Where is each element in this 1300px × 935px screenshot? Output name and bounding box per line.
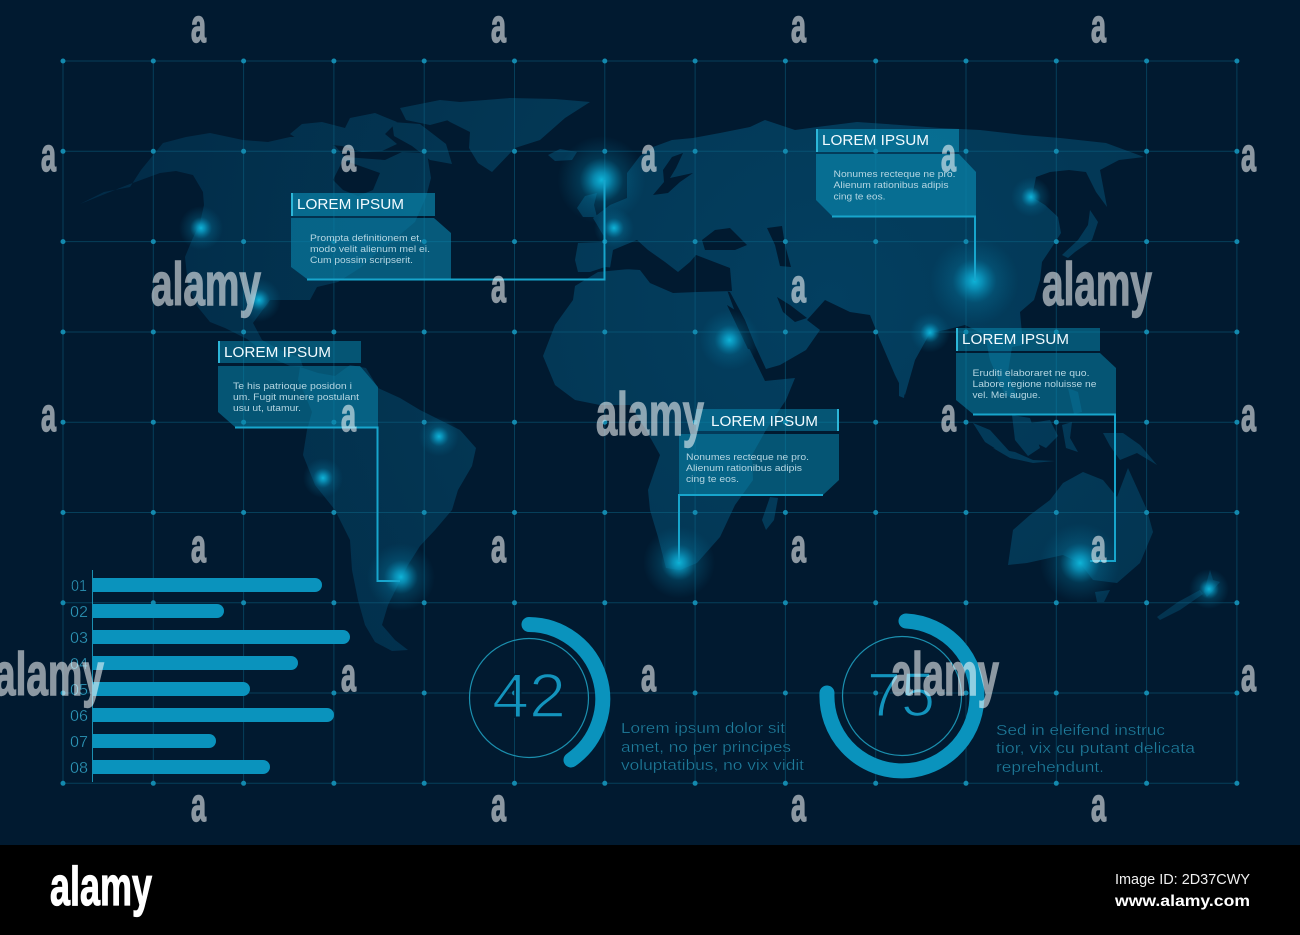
stock watermark overlay: a — [491, 259, 506, 312]
gauge text: 75: Sed in eleifend instruc — [996, 723, 1165, 739]
footer bar: www.alamy.com — [1114, 893, 1250, 910]
stock watermark overlay: a — [791, 0, 806, 52]
bar chart: 04 — [70, 656, 88, 673]
stock watermark overlay: a — [941, 388, 956, 441]
gauge text: 42: amet, no per principes — [621, 740, 791, 756]
bar chart: 01 — [71, 578, 87, 595]
panel: north america callout: modo velit alienum mel ei. — [310, 244, 430, 255]
stock watermark overlay: a — [191, 519, 206, 572]
panel: africa callout — [679, 409, 839, 562]
stock watermark overlay: a — [791, 519, 806, 572]
panel: south america callout: LOREM IPSUM — [224, 344, 331, 361]
stock watermark overlay: a — [491, 778, 506, 831]
stock watermark overlay: a — [341, 648, 356, 701]
gauge: 75 — [827, 621, 977, 771]
stock watermark overlay: alamy — [596, 381, 704, 448]
bar chart: 02 — [70, 604, 88, 621]
panel: south america callout — [218, 341, 400, 581]
coordinate grid — [63, 61, 1240, 783]
world map — [80, 98, 1220, 651]
stock watermark overlay: a — [1091, 778, 1106, 831]
stock watermark overlay: a — [491, 0, 506, 52]
stock watermark overlay: alamy — [151, 251, 261, 318]
panel: asia callout: Nonumes recteque ne pro. — [834, 169, 956, 180]
water bodies cut out of the map — [333, 153, 807, 350]
panel: south america callout: um. Fugit munere postulant — [233, 392, 359, 403]
panel: south america callout: Te his patrioque posidon i — [233, 381, 352, 392]
stock watermark overlay: a — [791, 778, 806, 831]
stock watermark overlay: alamy — [1042, 251, 1152, 318]
panel: oceania callout: Eruditi elaboraret ne quo. — [972, 368, 1090, 379]
stock watermark overlay: a — [641, 128, 656, 181]
stock watermark overlay: a — [791, 259, 806, 312]
stock watermark overlay: a — [1091, 0, 1106, 52]
panel: north america callout: Prompta definitionem et, — [310, 233, 422, 244]
stock watermark overlay: alamy — [891, 641, 999, 708]
panel: oceania callout — [956, 328, 1116, 561]
stock watermark overlay: a — [341, 388, 356, 441]
panel: africa callout: Nonumes recteque ne pro. — [686, 452, 809, 463]
gauge text: 42: voluptatibus, no vix vidit — [621, 758, 804, 774]
panel: asia callout: LOREM IPSUM — [822, 132, 929, 149]
gauge: 42 — [470, 624, 603, 760]
bar chart: 07 — [70, 734, 88, 751]
stock watermark overlay: a — [1241, 648, 1256, 701]
panel: asia callout: Alienum rationibus adipis — [834, 180, 949, 191]
panel: oceania callout: LOREM IPSUM — [962, 331, 1069, 348]
panel: south america callout: usu ut, utamur. — [233, 403, 301, 414]
panel: oceania callout: vel. Mei augue. — [972, 390, 1040, 401]
stock watermark overlay: a — [1241, 388, 1256, 441]
stock watermark overlay: a — [1091, 519, 1106, 572]
bar chart: 03 — [70, 630, 88, 647]
stock watermark overlay: a — [41, 388, 56, 441]
panel: north america callout: Cum possim scripserit. — [310, 255, 413, 266]
panel: oceania callout: Labore regione noluisse ne — [972, 379, 1096, 390]
gauge text: 42: Lorem ipsum dolor sit — [621, 721, 785, 737]
stock watermark overlay: a — [191, 0, 206, 52]
bar chart — [70, 570, 350, 782]
panel: africa callout: cing te eos. — [686, 474, 739, 485]
panel: africa callout: LOREM IPSUM — [711, 413, 818, 430]
panel: north america callout — [291, 180, 604, 280]
stock watermark overlay: a — [341, 128, 356, 181]
stock watermark overlay: a — [1241, 128, 1256, 181]
bar chart: 05 — [70, 682, 88, 699]
panel: asia callout — [816, 129, 976, 281]
location glows — [179, 136, 1229, 611]
stock watermark overlay: a — [41, 128, 56, 181]
gauge text: 75 — [996, 723, 1196, 776]
bar chart: 08 — [70, 760, 88, 777]
gauge: 75: 75 — [867, 661, 935, 730]
gauge text: 75: reprehendunt. — [996, 760, 1104, 776]
bar chart: 06 — [70, 708, 88, 725]
panel: asia callout: cing te eos. — [834, 192, 886, 202]
panel: north america callout: LOREM IPSUM — [297, 196, 404, 213]
stock watermark overlay: a — [641, 648, 656, 701]
stock watermark overlay: a — [941, 128, 956, 181]
footer bar: alamy — [50, 855, 152, 917]
gauge text: 42 — [621, 721, 804, 774]
footer bar: Image ID: 2D37CWY — [1115, 871, 1250, 888]
footer bar — [0, 845, 1300, 935]
gauge: 42: 42 — [492, 662, 566, 731]
panel: africa callout: Alienum rationibus adipis — [686, 463, 802, 474]
stock watermark overlay: a — [491, 519, 506, 572]
gauge text: 75: tior, vix cu putant delicata — [996, 741, 1196, 757]
stock watermark overlay: a — [191, 778, 206, 831]
